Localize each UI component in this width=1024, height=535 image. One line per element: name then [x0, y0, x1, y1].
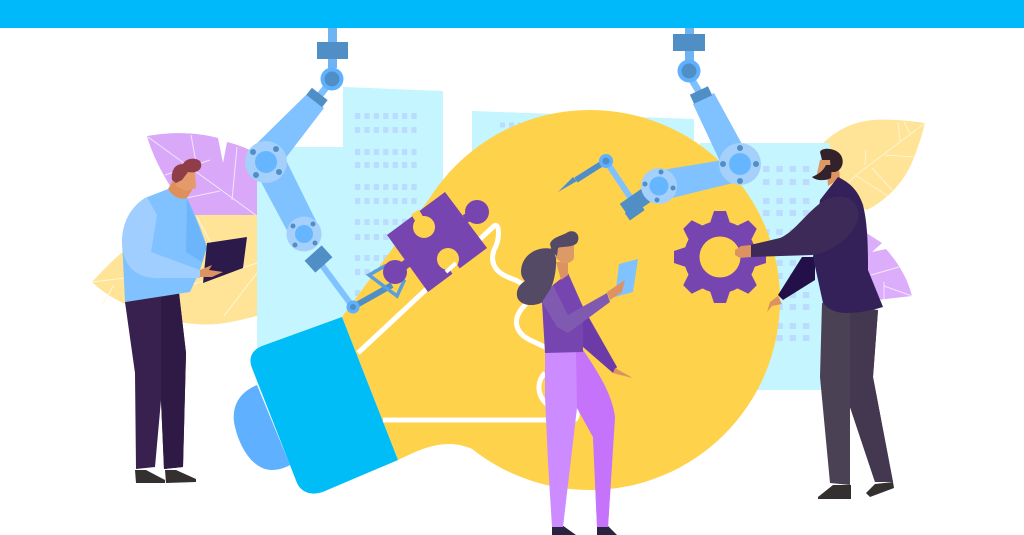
hair [820, 149, 843, 172]
shoes [552, 525, 617, 535]
shoes [818, 482, 894, 499]
hair [517, 248, 556, 305]
sleeve [542, 285, 610, 333]
building middle [472, 111, 694, 170]
hands [607, 280, 633, 378]
purple leaf right [860, 232, 912, 300]
robot arm right [558, 28, 761, 220]
beard [812, 165, 832, 180]
tablet [615, 259, 638, 297]
gear [674, 211, 766, 303]
man left [122, 159, 247, 483]
face [554, 243, 574, 263]
top bar [0, 0, 1024, 28]
neck [826, 160, 840, 186]
far arm [778, 257, 815, 300]
sleeve [750, 197, 858, 257]
trousers [820, 303, 893, 485]
yellow leaf right [823, 120, 925, 210]
windows right [763, 169, 812, 338]
jacket [813, 177, 883, 313]
trousers [545, 350, 615, 527]
light bulb [342, 110, 780, 490]
man right [735, 149, 894, 499]
shirt [122, 189, 207, 302]
torso [542, 273, 583, 353]
shoes [135, 470, 196, 483]
face [816, 158, 830, 178]
yellow leaf left [92, 215, 260, 325]
bulb cap back [234, 385, 290, 470]
face [176, 170, 196, 191]
windows middle [500, 122, 520, 128]
robot arm left [245, 28, 404, 314]
hair [172, 159, 201, 183]
building left [257, 87, 443, 362]
building right [700, 143, 830, 390]
far arm [582, 305, 617, 373]
hair top [550, 231, 578, 256]
filament [358, 225, 577, 420]
puzzle piece [383, 192, 489, 292]
neck [168, 176, 192, 202]
hands [735, 245, 782, 312]
tablet [203, 237, 247, 283]
bulb cap [250, 317, 398, 494]
woman [517, 231, 638, 535]
hand [200, 265, 223, 277]
windows left [355, 116, 417, 293]
purple leaf left [147, 133, 260, 220]
trousers [125, 293, 186, 469]
neck [556, 262, 568, 280]
